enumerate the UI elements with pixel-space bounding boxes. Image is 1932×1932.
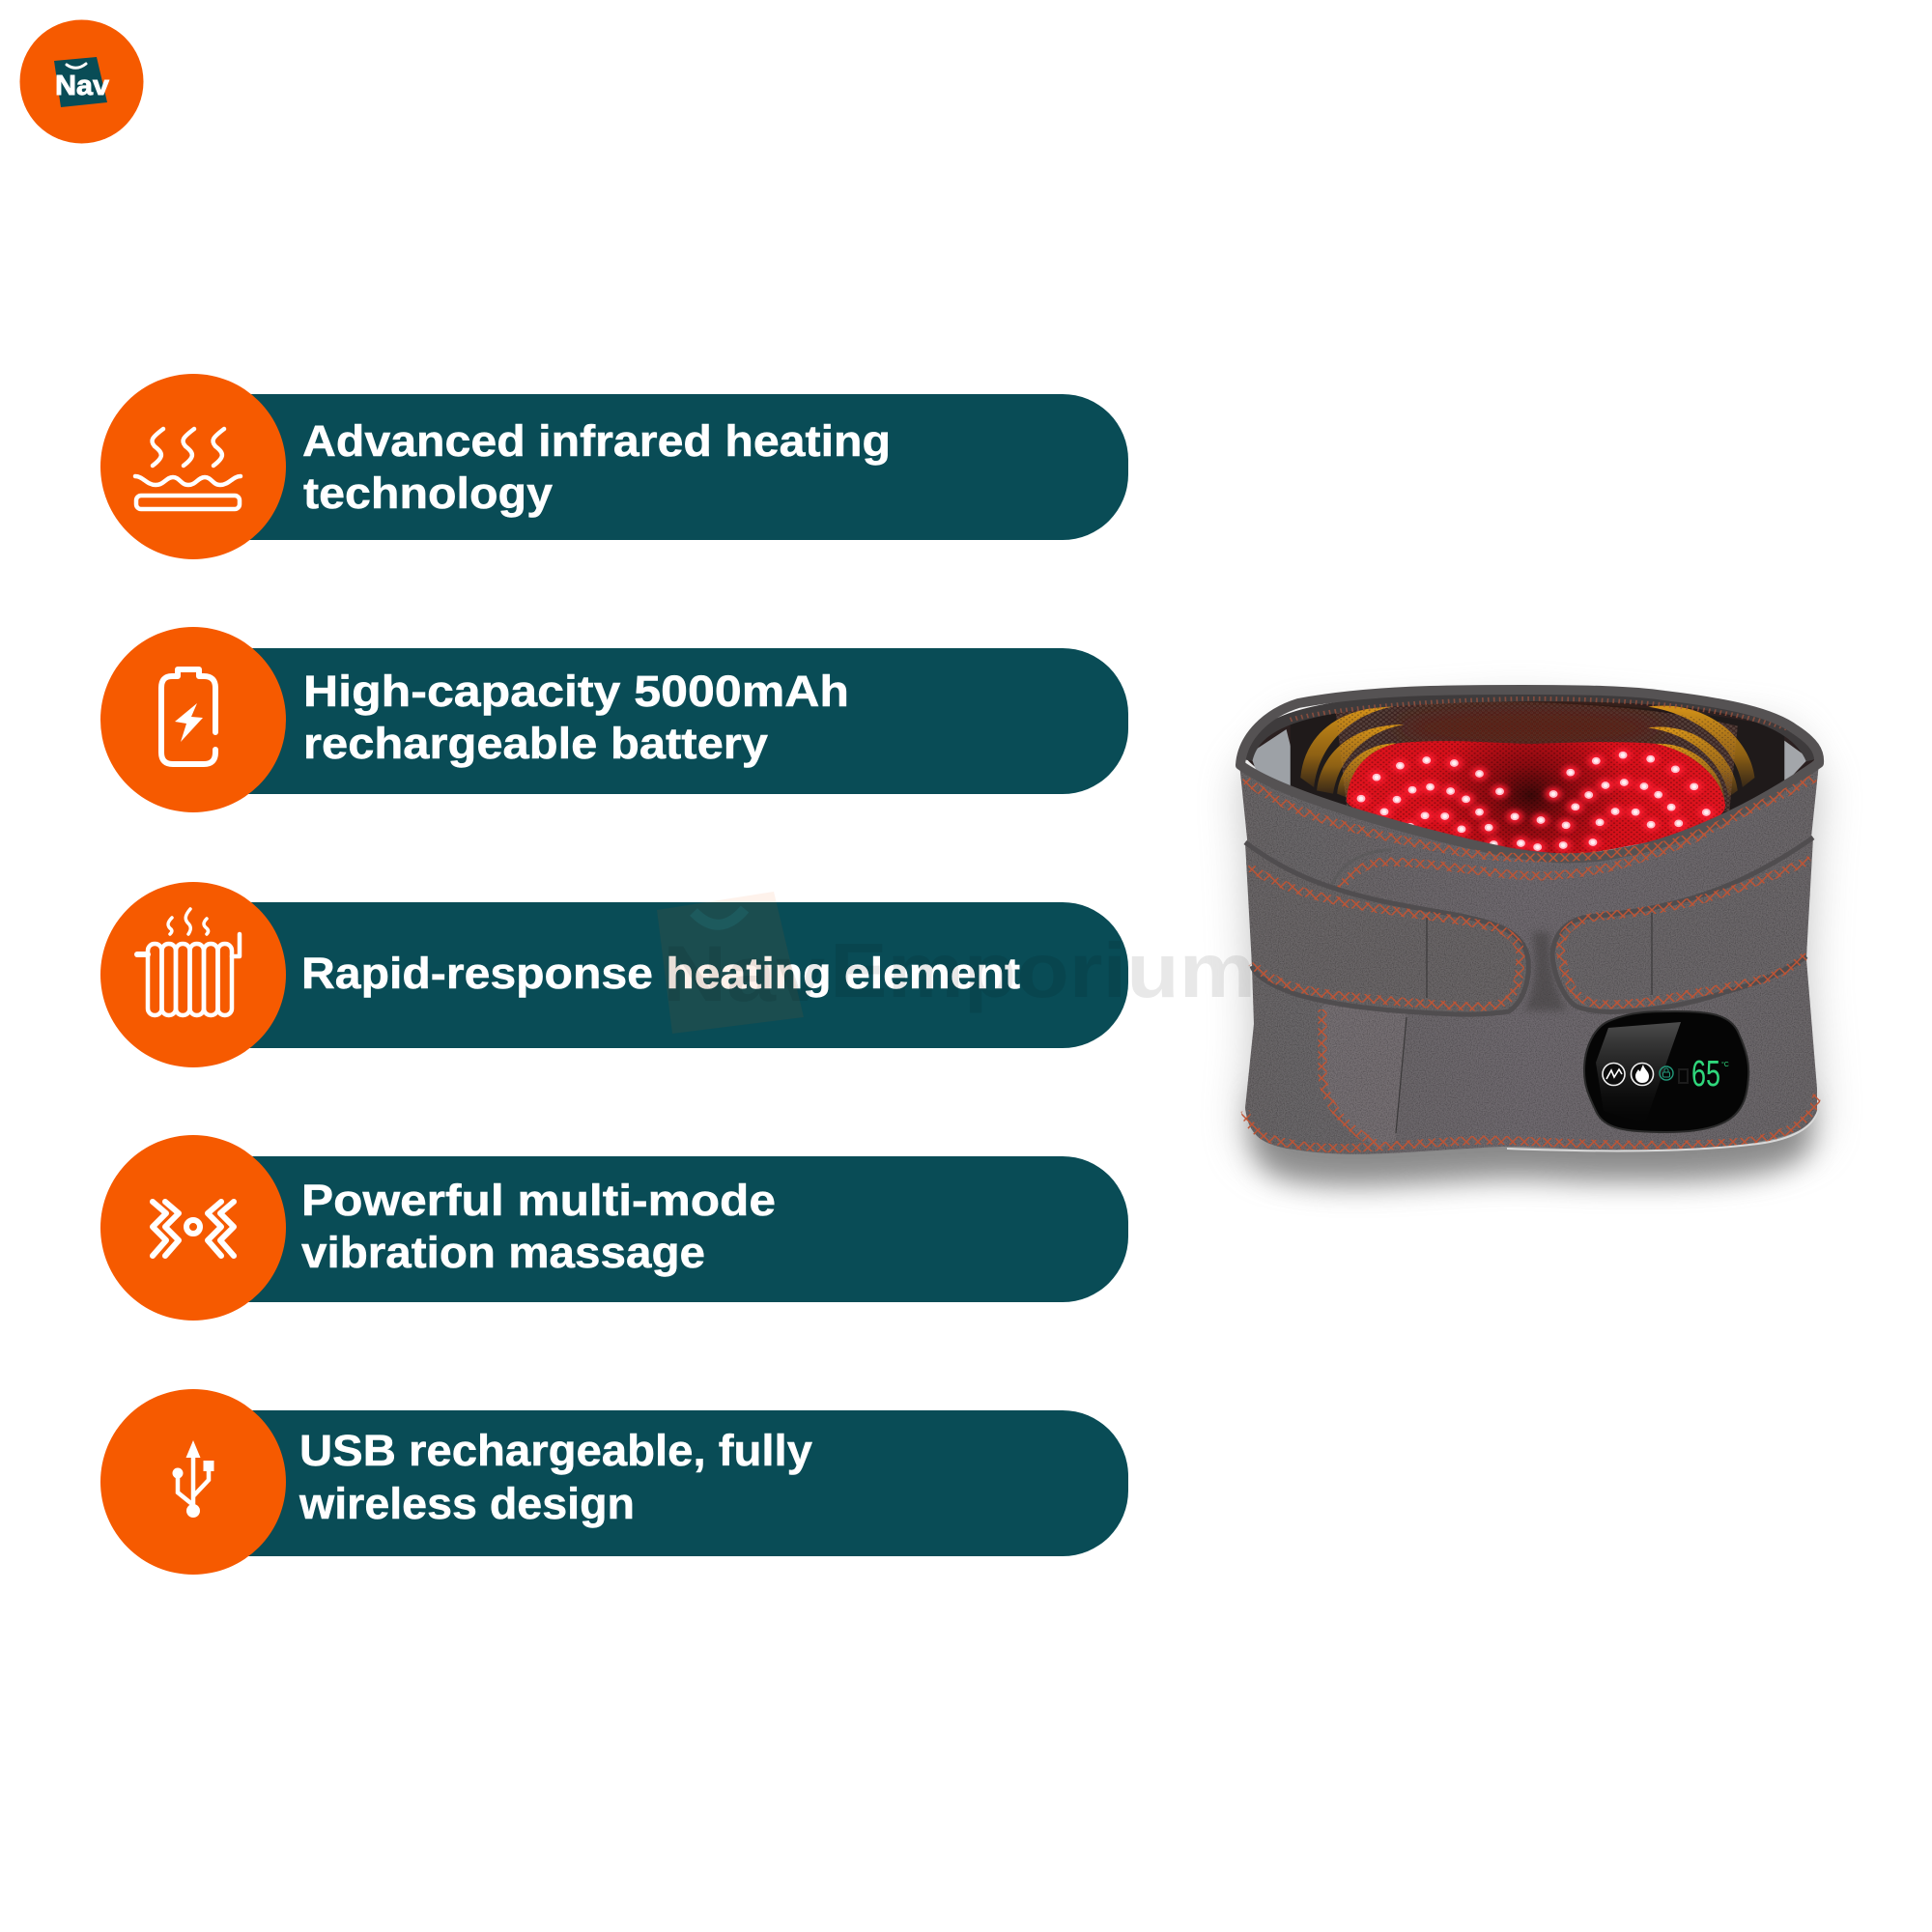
feature row 2: battery xyxy=(100,627,1128,812)
icon: USB symbol xyxy=(172,1440,214,1518)
feature text 5 xyxy=(298,1426,812,1528)
icon: heat waves above a heating plate xyxy=(135,429,241,509)
right strap xyxy=(1552,838,1813,1011)
feature text 5: wireless design xyxy=(298,1479,635,1528)
feature row 5: USB xyxy=(100,1389,1128,1575)
feature text 4: vibration massage xyxy=(301,1228,705,1277)
control panel xyxy=(1584,1011,1748,1132)
icon: battery with bolt xyxy=(161,669,215,764)
feature text 2: High-capacity 5000mAh xyxy=(303,667,849,716)
icon: radiator with steam xyxy=(137,909,240,1015)
belt main body xyxy=(1239,763,1819,1154)
mode icon xyxy=(1603,1063,1625,1086)
temperature readout: 65 xyxy=(1691,1054,1720,1094)
LED points xyxy=(1358,753,1710,850)
feature text 2: rechargeable battery xyxy=(303,719,768,768)
rim band around opening xyxy=(1240,690,1819,858)
icon: vibration zigzags xyxy=(153,1202,234,1256)
feature text 1: technology xyxy=(303,469,553,518)
feature text 5: USB rechargeable, fully xyxy=(299,1426,812,1475)
watermark xyxy=(657,892,1256,1034)
product photo: heated belt xyxy=(1239,690,1819,1185)
watermark: Emporium xyxy=(830,927,1256,1013)
feature row 4: vibration xyxy=(100,1135,1128,1321)
yellow heat arcs xyxy=(1300,706,1754,804)
white base line xyxy=(1507,1111,1818,1151)
temperature unit: °C xyxy=(1721,1061,1729,1068)
LED glow xyxy=(1358,753,1710,850)
logo badge: Nav xyxy=(55,71,109,101)
belt shadow xyxy=(1241,705,1819,1185)
feature text 3: Rapid-response heating element xyxy=(301,949,1020,998)
feature text 4 xyxy=(301,1176,776,1277)
feature row 1: infrared heating xyxy=(100,374,1128,559)
belt interior with LEDs xyxy=(1241,691,1818,857)
bottom stitching xyxy=(1245,1094,1817,1149)
centre gap shadow xyxy=(1524,932,1567,1010)
feature row 3: heating element xyxy=(100,882,1128,1067)
logo badge xyxy=(19,19,143,143)
watermark: Nav xyxy=(663,930,825,1018)
front stitching xyxy=(1243,778,1815,889)
lower flap xyxy=(1322,1005,1406,1150)
feature text 1 xyxy=(302,416,891,518)
feature text 2 xyxy=(303,667,849,768)
lock icon xyxy=(1660,1066,1673,1080)
flame icon xyxy=(1631,1063,1654,1086)
left strap xyxy=(1245,842,1528,1014)
feature text 1: Advanced infrared heating xyxy=(302,416,891,466)
feature text 4: Powerful multi-mode xyxy=(301,1176,776,1225)
